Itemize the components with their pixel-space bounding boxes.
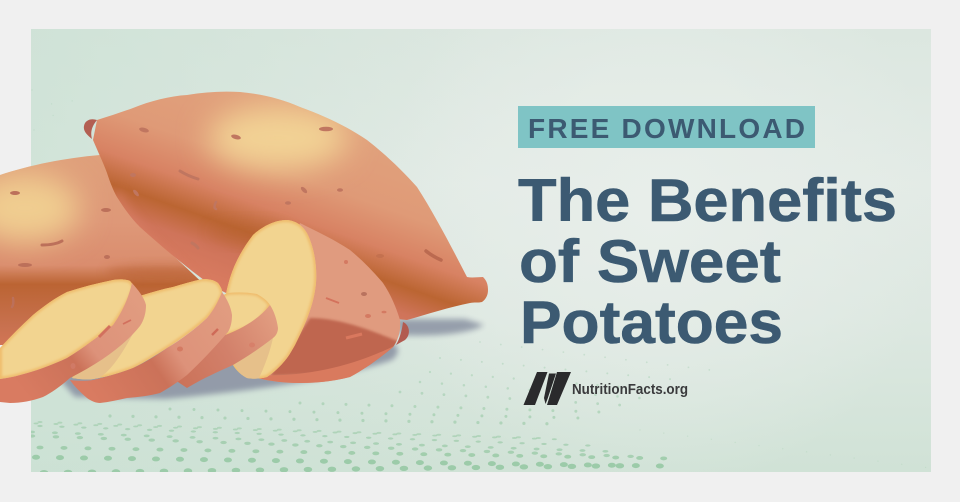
third slice (178, 292, 278, 388)
badge: free download (518, 106, 815, 148)
large slice face (225, 220, 316, 385)
title: The Benefits (518, 167, 897, 234)
back potato skin marks (10, 191, 111, 307)
large sweet potato (84, 92, 488, 320)
front slice (0, 279, 146, 403)
cut sweet potato piece (250, 223, 409, 390)
badge: free download: FREE DOWNLOAD (528, 113, 805, 144)
title: of Sweet (519, 228, 781, 295)
logo: NutritionFacts.org (524, 372, 688, 405)
logo: NutritionFacts.org: NutritionFacts.org (572, 381, 688, 398)
skin marks (130, 127, 441, 260)
stem nub left (84, 119, 97, 139)
title: Potatoes (520, 289, 783, 356)
cut piece lower shadow (270, 318, 400, 376)
halftone dot floor (20, 90, 930, 473)
nub right (396, 322, 409, 345)
back sweet potato (0, 155, 215, 345)
shadow under potatoes (60, 319, 484, 399)
title (518, 167, 897, 356)
icon: N mark (524, 372, 571, 405)
second slice (70, 279, 232, 403)
